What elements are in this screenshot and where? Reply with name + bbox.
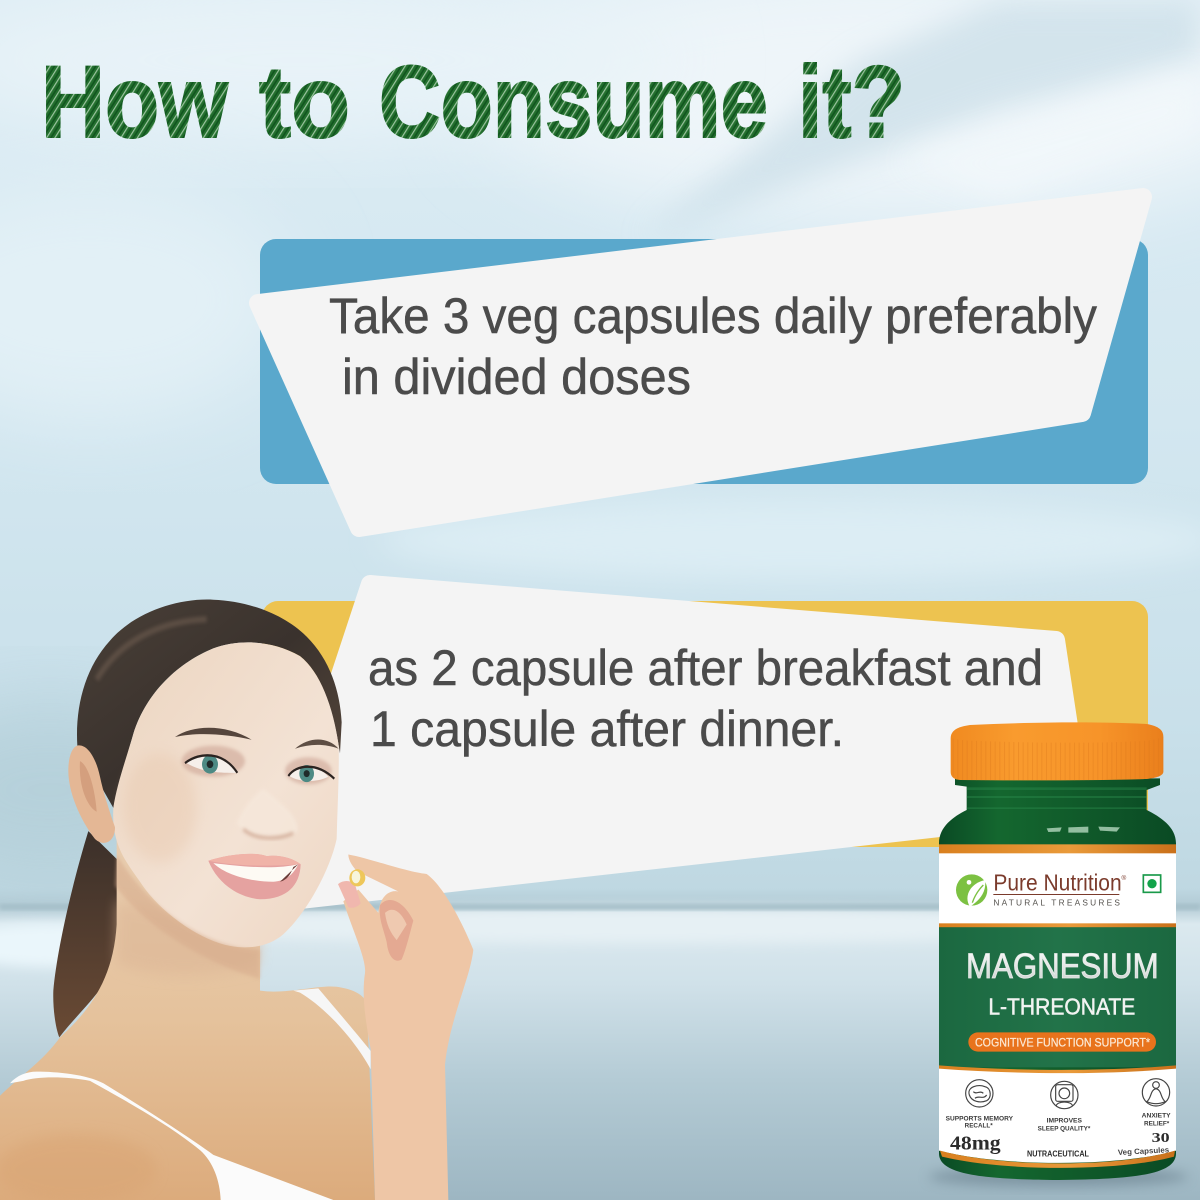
ear [68, 745, 115, 843]
nose [237, 788, 298, 839]
smile [208, 854, 301, 899]
capsule count: 30 [1152, 1130, 1170, 1145]
white brand label [939, 853, 1176, 924]
category: NUTRACEUTICAL [1027, 1149, 1090, 1159]
benefit pill: COGNITIVE FUNCTION SUPPORT* [975, 1035, 1150, 1049]
white top [10, 988, 371, 1200]
ponytail [53, 831, 120, 1037]
timing text [368, 640, 1043, 757]
brand divider [993, 894, 1119, 895]
benefit: sleep: SLEEP QUALITY* [1038, 1125, 1091, 1132]
forearm and hand [343, 855, 473, 1200]
dosage text [329, 288, 1097, 405]
product variant: L-THREONATE [988, 994, 1135, 1020]
product name: MAGNESIUM [966, 947, 1159, 986]
benefit: anxiety: RELIEF* [1144, 1121, 1170, 1128]
title: to [259, 45, 350, 159]
left eye [185, 755, 237, 774]
hair highlight [97, 619, 207, 679]
timing text: as 2 capsule after breakfast and [368, 640, 1043, 696]
neck ridges [967, 787, 1147, 809]
thumb nail [338, 881, 361, 908]
benefit: sleep: IMPROVES [1047, 1117, 1082, 1124]
blue backing card [260, 239, 1148, 484]
glass highlights [1047, 827, 1120, 833]
eyebrows [175, 728, 252, 740]
benefit: anxiety: ANXIETY [1142, 1112, 1171, 1119]
title: Consume [379, 45, 768, 159]
orange divider [939, 923, 1176, 927]
capsule unit: Veg Capsules [1118, 1145, 1169, 1157]
dosage text: in divided doses [342, 349, 691, 405]
bottle shadow [928, 1167, 1188, 1187]
icon: meditation [1142, 1079, 1170, 1106]
benefit: memory: RECALL* [965, 1122, 993, 1129]
benefit: sleep [1038, 1117, 1091, 1132]
icon: brain [966, 1080, 993, 1107]
upper orange band [939, 844, 1176, 854]
hair [77, 600, 342, 808]
green product label [939, 927, 1176, 1067]
dose: 48mg [950, 1132, 1001, 1154]
chin shadow on neck [115, 855, 260, 979]
orange cap [951, 722, 1163, 780]
capsule [349, 869, 365, 886]
veg mark [1143, 875, 1161, 892]
benefit pill [968, 1032, 1156, 1052]
title: it? [798, 45, 905, 159]
brand name: Pure Nutrition [993, 869, 1122, 895]
face [113, 642, 339, 947]
eye shadow [182, 746, 245, 777]
benefit: memory: SUPPORTS MEMORY [946, 1116, 1013, 1123]
curled fingers [380, 900, 413, 961]
lower white label [939, 1067, 1176, 1163]
logo mark [956, 874, 987, 907]
white speech shape [300, 584, 1082, 900]
brand tagline: NATURAL TREASURES [993, 897, 1120, 907]
cheek warmth [123, 753, 197, 862]
yellow backing card [262, 601, 1148, 847]
title: How [41, 45, 229, 159]
title [41, 45, 905, 159]
benefit: memory [946, 1116, 1013, 1129]
panel: timing instruction (yellow) [262, 584, 1148, 900]
neck shadow [117, 901, 260, 975]
lower orange band [939, 1065, 1176, 1168]
registered mark: ® [1121, 874, 1126, 882]
dosage text: Take 3 veg capsules daily preferably [329, 288, 1097, 344]
icon: sleep [1051, 1081, 1078, 1109]
shoulder shading [0, 1135, 157, 1200]
bottle glass [939, 778, 1176, 1180]
shoulders and chest [0, 839, 375, 1200]
panel: dosage instruction (blue) [258, 197, 1148, 528]
right eye [288, 765, 334, 782]
timing text: 1 capsule after dinner. [370, 701, 844, 757]
white speech shape [258, 197, 1143, 528]
benefit: anxiety [1142, 1112, 1171, 1128]
photo: smiling woman holding capsule [0, 600, 473, 1200]
product: Pure Nutrition bottle [928, 722, 1188, 1187]
